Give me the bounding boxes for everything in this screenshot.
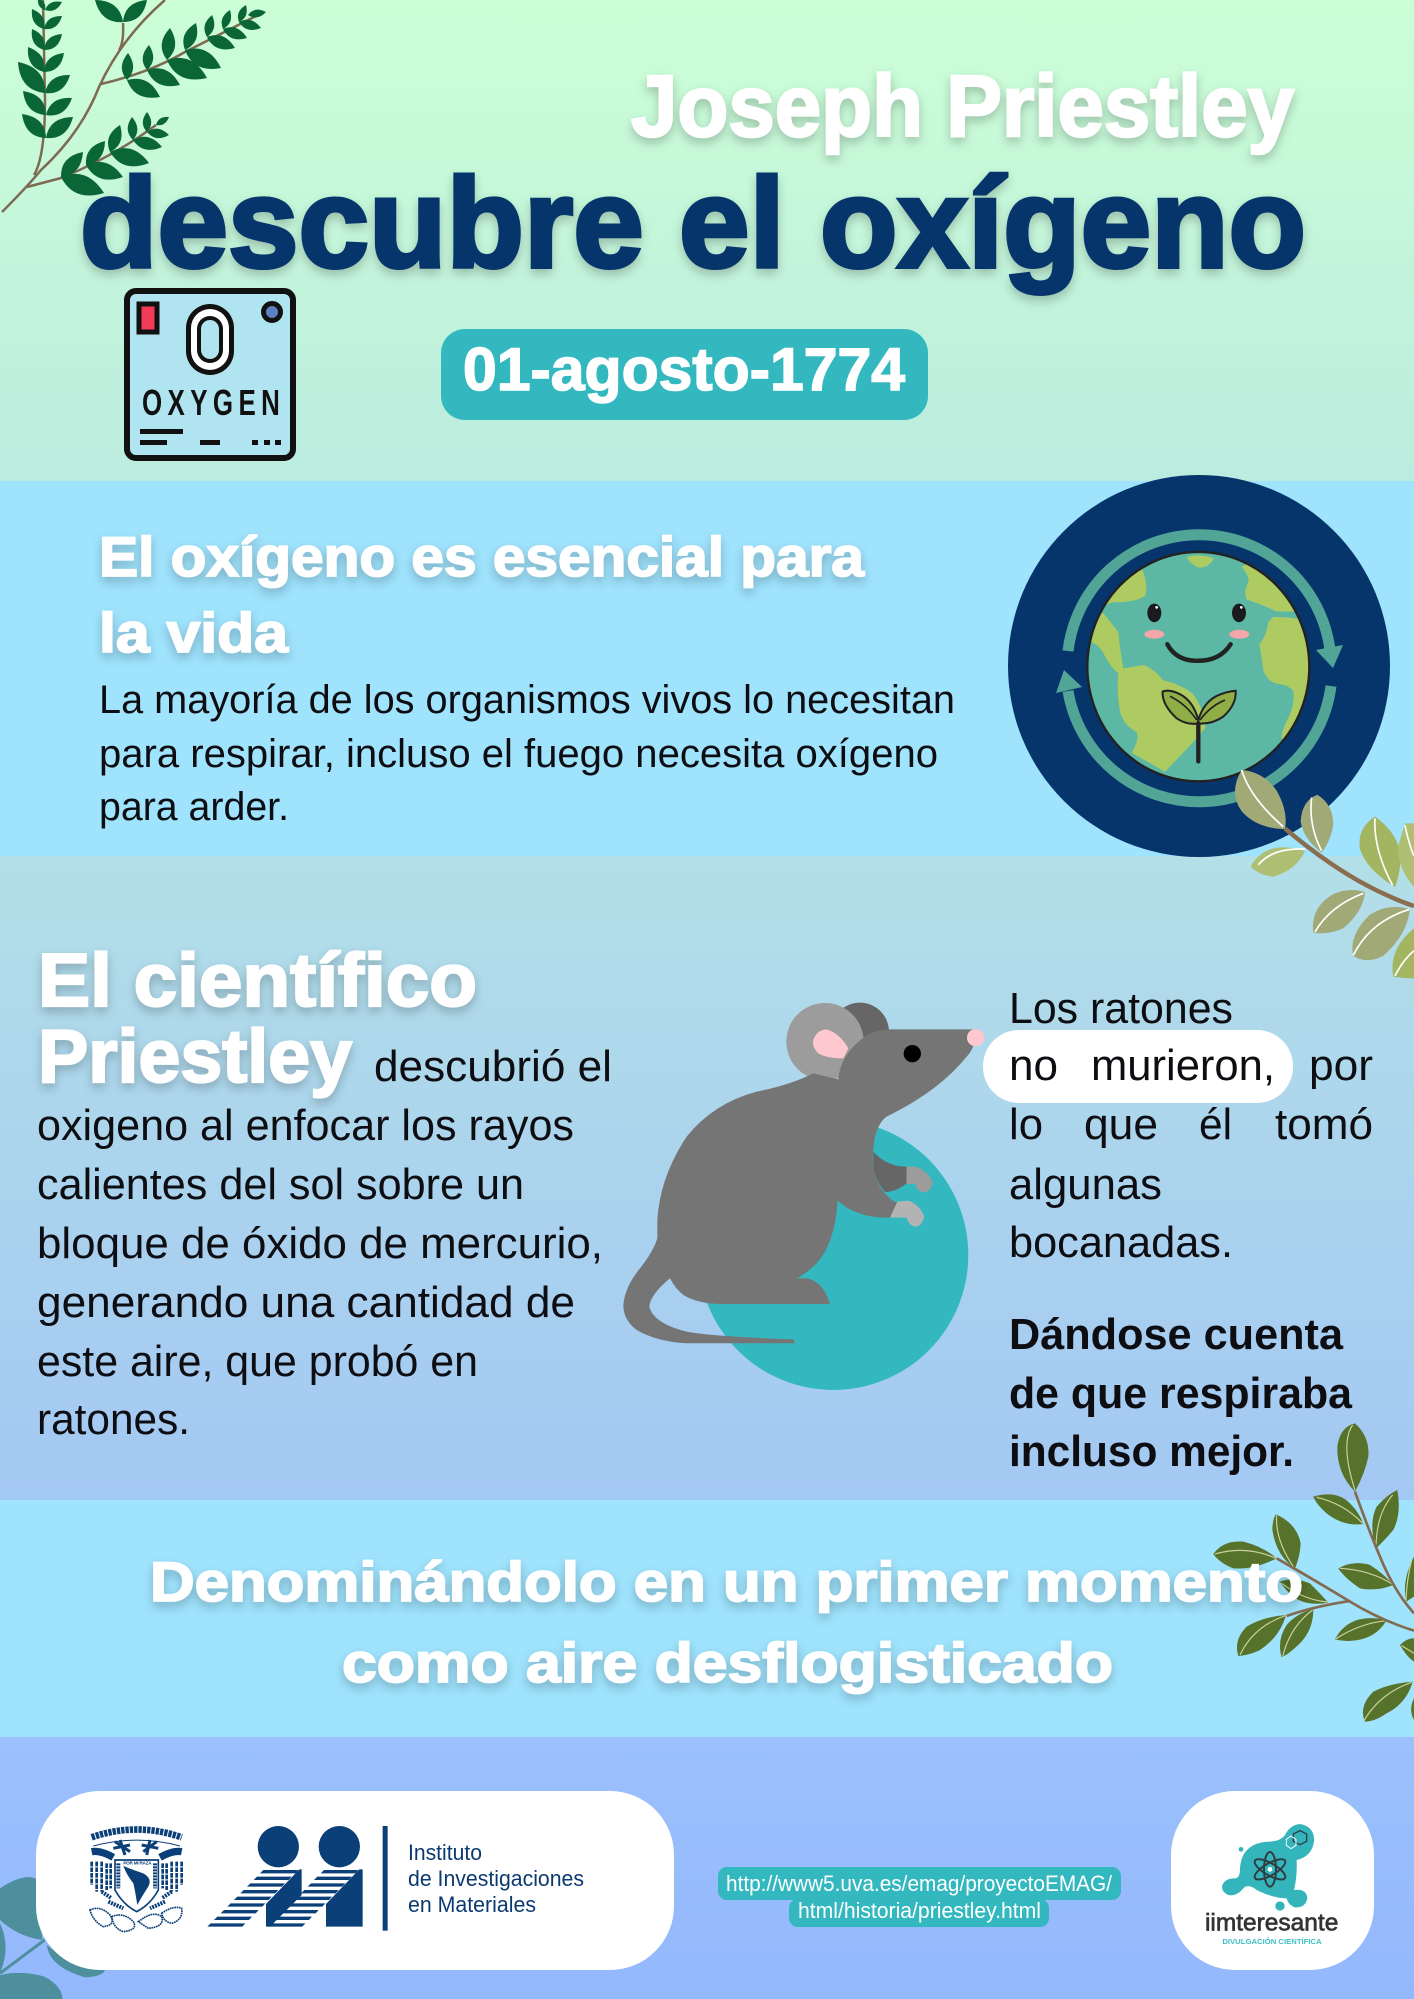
text block: the mice did not die: él [1199,1100,1232,1149]
text block: the mice did not die: no [1009,1041,1058,1090]
source link: html/historia/priestley.html [798,1898,1041,1923]
title: Joseph Priestley: Joseph Priestley [631,58,1294,155]
text block: the mice did not die: bocanadas. [1009,1218,1233,1267]
text block: the mice did not die: que [1084,1100,1158,1149]
logo: UNAM crest [90,1829,182,1932]
text block: breathing better: de que respiraba [1009,1369,1353,1418]
text block: discovery description: este aire, que probó en [37,1337,478,1386]
panel: institution logos [36,1791,674,1970]
text block: discovery description: oxigeno al enfocar los rayos [37,1101,574,1150]
text block: discovery description: descubrió el [374,1042,612,1091]
panel: footer background [0,1737,1414,1999]
globe with face [1080,546,1313,781]
text block: the mice did not die: murieron, [1091,1041,1275,1090]
text block: discovery description [37,1042,612,1444]
icon: green leafy branch right [1213,1423,1414,1722]
heading: oxygen is essential: la vida [99,601,289,664]
icon: mouse on teal circle [623,1003,984,1390]
text block: the mice did not die: algunas [1009,1160,1162,1209]
source link: http://www5.uva.es/emag/proyectoEMAG/ [726,1871,1113,1896]
highlight pill: no murieron [983,1030,1293,1103]
heading: the scientist Priestley: Priestley [38,1014,352,1098]
source link [718,1867,1121,1927]
panel: dephlogisticated air background [0,1500,1414,1737]
panel: header background [0,0,1414,481]
wordmark: iimteresante [1205,1910,1338,1937]
heading: oxygen is essential [99,525,865,664]
logo: UNAM crest: POR MI RAZA [123,1861,152,1866]
date badge: 01-agosto-1774 [463,336,906,403]
panel: iimteresante logo [1171,1791,1374,1970]
text: institute name: Instituto [408,1840,482,1865]
text: institute name: en Materiales [408,1892,536,1917]
text block: organisms need oxygen: La mayoría de los organismos vivos lo necesitan [99,678,955,722]
text block: discovery description: ratones. [37,1395,190,1444]
text block: the mice did not die: tomó [1275,1100,1373,1149]
icon: olive branch [1235,770,1414,978]
text block: discovery description: calientes del sol sobre un [37,1160,524,1209]
blob with atom [1222,1824,1314,1911]
text block: the mice did not die [1009,984,1373,1267]
text block: discovery description: generando una cantidad de [37,1278,575,1327]
heading: the scientist Priestley [38,938,477,1098]
icon: teal leaves bottom left [0,1877,105,1999]
heading: dephlogisticated air [150,1550,1303,1694]
panel: oxygen essential background [0,481,1414,857]
panel: scientist background [0,856,1414,1501]
text: institute name [408,1840,584,1917]
icon: oxygen periodic card: OXYGEN [142,383,285,423]
heading: the scientist Priestley: El científico [38,938,477,1022]
icon: green branch top left [2,0,267,212]
heading: dephlogisticated air: Denominándolo en un primer momento [150,1550,1303,1613]
text block: breathing better [1009,1310,1353,1476]
recycle arrows [1056,535,1343,802]
text block: breathing better: Dándose cuenta [1009,1310,1344,1359]
text block: the mice did not die: por [1309,1041,1373,1090]
icon: oxygen periodic card [127,291,293,458]
text block: organisms need oxygen: para arder. [99,785,289,829]
heading: dephlogisticated air: como aire desflogisticado [342,1631,1113,1694]
text block: discovery description: bloque de óxido de mercurio, [37,1219,603,1268]
heading: oxygen is essential: El oxígeno es esencial para [99,525,865,588]
date badge [441,329,928,420]
text block: the mice did not die: Los ratones [1009,984,1233,1033]
tagline: DIVULGACIÓN CIENTÍFICA [1222,1937,1322,1946]
text block: organisms need oxygen: para respirar, incluso el fuego necesita oxígeno [99,732,938,776]
text block: the mice did not die: lo [1009,1100,1043,1149]
logo: IIM [207,1826,388,1931]
text block: organisms need oxygen [99,678,955,829]
text block: breathing better: incluso mejor. [1009,1427,1294,1476]
text: institute name: de Investigaciones [408,1866,584,1891]
icon: smiling earth [1008,475,1390,857]
title: descubre el oxígeno: descubre el oxígeno [80,152,1306,294]
